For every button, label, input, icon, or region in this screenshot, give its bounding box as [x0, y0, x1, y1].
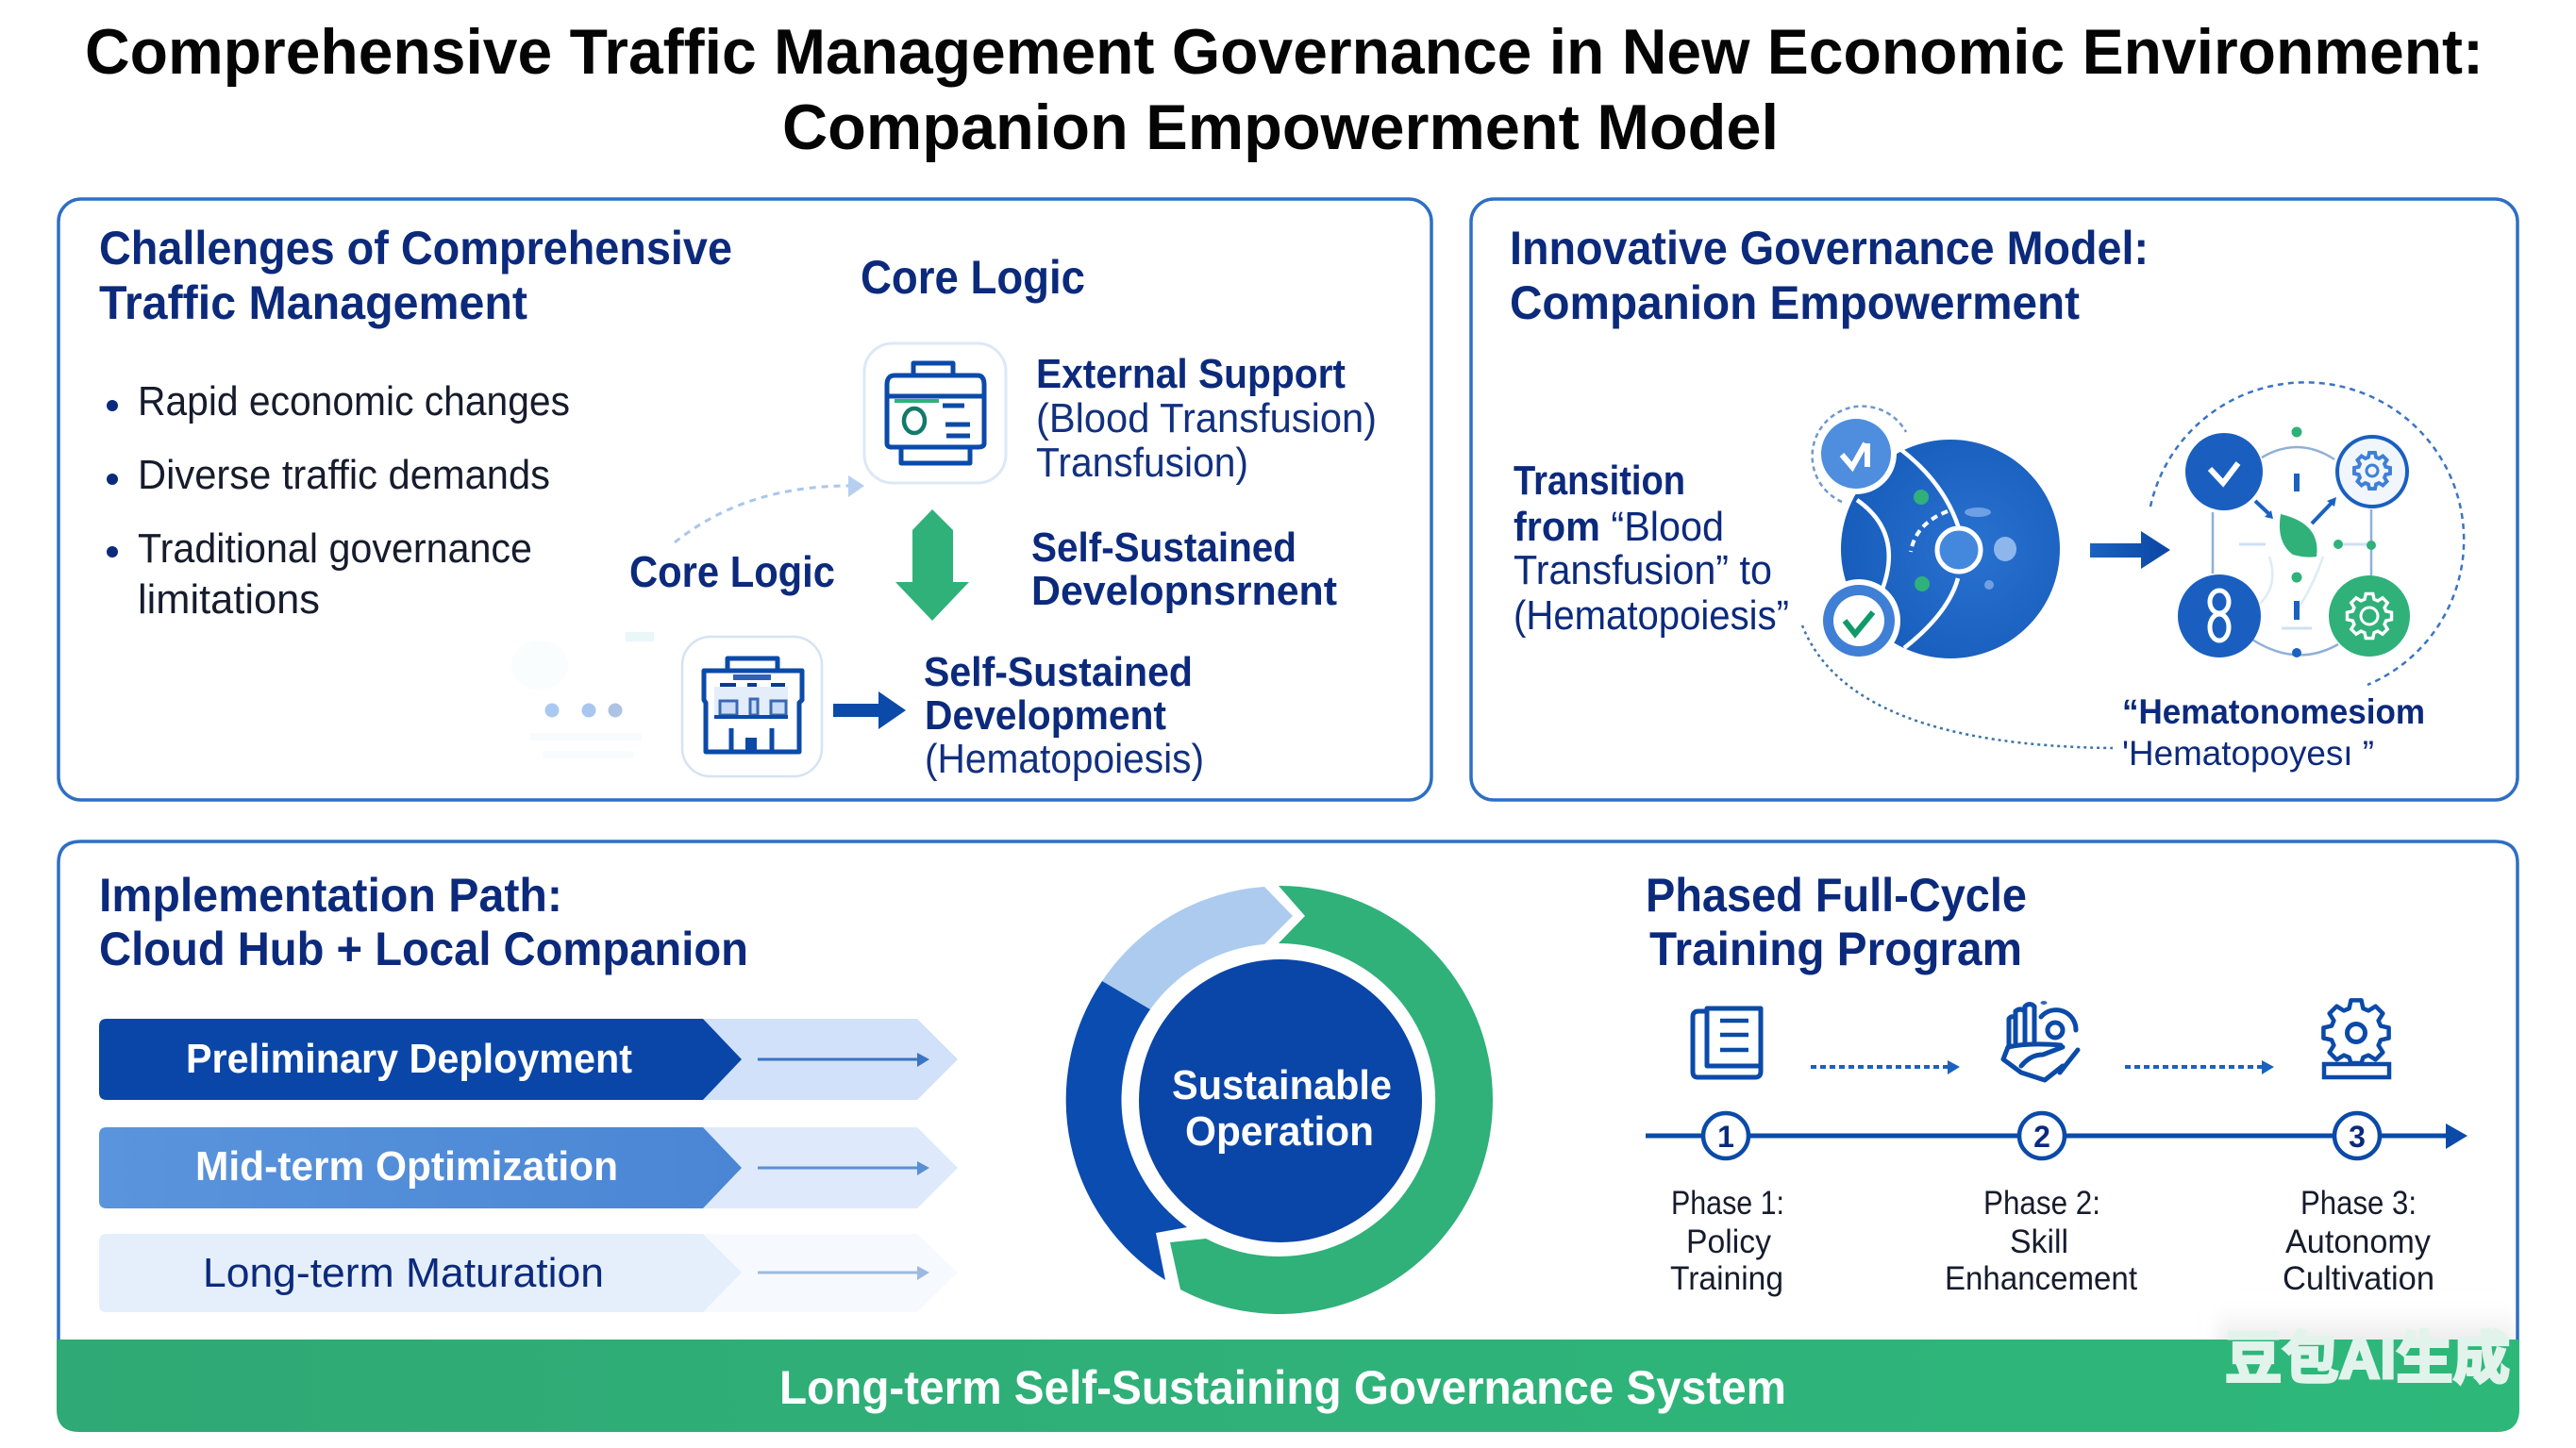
bullet list: Diverse traffic demands	[138, 452, 550, 498]
transition text: (Hematopoiesis”	[1514, 592, 1789, 639]
hematopoiesis caption: “Hematonomesiom	[2122, 692, 2425, 731]
arrow: dashed curve	[675, 475, 864, 542]
self-sustained development label: Self-Sustained	[1031, 524, 1296, 571]
chevron: preliminary deployment	[99, 1019, 958, 1100]
icon: infinity circle	[2178, 574, 2261, 657]
chevron: long-term maturation	[99, 1234, 958, 1312]
illustration: hematopoiesis network	[2150, 382, 2464, 685]
transition text: Transfusion” to	[1514, 547, 1772, 593]
panel: challenges and core logic	[59, 199, 1431, 800]
icon: hand with gear	[2003, 1001, 2078, 1080]
title: Comprehensive Traffic Management Governance in New Economic Environment:	[85, 16, 2484, 88]
arrow: to hematopoiesis	[2090, 531, 2170, 569]
self-sustained development label: Developnsrnent	[1031, 568, 1337, 614]
timeline: 1	[1717, 1120, 1734, 1154]
self-sustained development (hematopoiesis) text: Self-Sustained	[924, 649, 1193, 695]
timeline: 3	[2349, 1120, 2366, 1154]
icon: green gear circle	[2329, 575, 2410, 657]
green banner	[57, 1340, 2519, 1432]
chevron: preliminary deployment: Preliminary Deployment	[186, 1036, 632, 1082]
title: Companion Empowerment Model	[782, 92, 1779, 163]
icon: gear on base	[2323, 1000, 2389, 1077]
icon: top check badge	[1813, 407, 1906, 502]
external support text: External Support	[1036, 351, 1346, 397]
heading: implementation path: Cloud Hub + Local Companion	[99, 923, 748, 975]
self-sustained development (hematopoiesis) text	[924, 649, 1204, 782]
heading: training program	[1646, 869, 2027, 975]
panel: innovative governance model	[1471, 199, 2517, 800]
icon: leaf	[2280, 514, 2317, 558]
panel: implementation path and training	[59, 841, 2517, 1340]
watermark: 豆包AI生成	[2225, 1327, 2510, 1390]
phase 3 label: Autonomy	[2285, 1223, 2431, 1260]
arrow: dotted 2	[2125, 1060, 2274, 1074]
icon: blue check circle	[2185, 433, 2263, 510]
heading: challenges: Challenges of Comprehensive	[99, 222, 732, 275]
heading: training program: Training Program	[1649, 923, 2022, 975]
phase 2 label: Skill	[2010, 1223, 2068, 1260]
bullet list: Rapid economic changes	[138, 378, 570, 424]
cycle: sustainable operation: Operation	[1185, 1108, 1374, 1155]
arrow: dotted 1	[1811, 1060, 1960, 1074]
chevron: mid-term optimization	[99, 1127, 958, 1208]
heading: implementation path	[99, 869, 748, 975]
phase 3 label: Phase 3:	[2300, 1185, 2417, 1222]
self-sustained development (hematopoiesis) text: Development	[925, 692, 1166, 739]
phase 1 label: Policy	[1686, 1223, 1771, 1260]
hematopoiesis caption	[2122, 692, 2425, 773]
timeline	[1646, 1113, 2467, 1158]
self-sustained development (hematopoiesis) text: (Hematopoiesis)	[925, 736, 1204, 782]
external support text: Transfusion)	[1036, 440, 1248, 486]
heading: training program: Phased Full-Cycle	[1646, 869, 2027, 922]
heading: governance model: Companion Empowerment	[1510, 276, 2080, 329]
icon: external support device	[864, 343, 1006, 483]
transition text: Transition	[1514, 458, 1685, 504]
icon: outlined gear circle	[2337, 437, 2407, 507]
title	[85, 16, 2484, 163]
cycle: sustainable operation	[1066, 886, 1493, 1314]
faint ghost card with dots	[511, 632, 654, 758]
self-sustained development label	[1031, 524, 1337, 614]
green banner: Long-term Self-Sustaining Governance System	[779, 1361, 1786, 1414]
hematopoiesis caption: 'Hematopoyesı ”	[2122, 734, 2374, 773]
chevron: long-term maturation: Long-term Maturation	[203, 1250, 604, 1296]
external support text: (Blood Transfusion)	[1036, 395, 1377, 441]
phase 2 label: Enhancement	[1945, 1260, 2137, 1297]
bullet list: Traditional governance	[138, 525, 532, 572]
cycle: sustainable operation: Sustainable	[1172, 1062, 1392, 1108]
chevron: mid-term optimization: Mid-term Optimization	[195, 1143, 618, 1190]
arrow: blue right	[833, 691, 906, 729]
icon: building	[682, 637, 822, 776]
heading: governance model	[1510, 222, 2149, 329]
heading: implementation path: Implementation Path:	[99, 869, 562, 922]
icon: bottom check badge	[1817, 579, 1900, 662]
phase 1 label: Phase 1:	[1671, 1185, 1784, 1222]
heading: governance model: Innovative Governance Model:	[1510, 222, 2149, 275]
bullet list: limitations	[138, 576, 320, 623]
bullet list	[107, 378, 570, 623]
illustration: blood transfusion cell	[1813, 407, 2060, 662]
connector: dotted curve	[1802, 625, 2113, 748]
external support text	[1036, 351, 1377, 486]
heading: challenges: Traffic Management	[99, 276, 527, 329]
phase 1 label: Training	[1670, 1260, 1783, 1297]
icon: document	[1693, 1008, 1761, 1077]
heading: challenges	[99, 222, 732, 329]
phase 3 label	[2283, 1185, 2434, 1297]
phase 2 label: Phase 2:	[1983, 1185, 2100, 1222]
phase 2 label	[1945, 1185, 2137, 1297]
arrow: green down	[895, 509, 969, 621]
heading: core logic top: Core Logic	[861, 251, 1085, 304]
phase 3 label: Cultivation	[2283, 1260, 2434, 1297]
transition text: from “Blood	[1514, 504, 1724, 550]
phase 1 label	[1670, 1185, 1784, 1297]
timeline: 2	[2033, 1120, 2050, 1154]
transition text	[1514, 458, 1789, 639]
label: core logic left: Core Logic	[629, 547, 835, 596]
